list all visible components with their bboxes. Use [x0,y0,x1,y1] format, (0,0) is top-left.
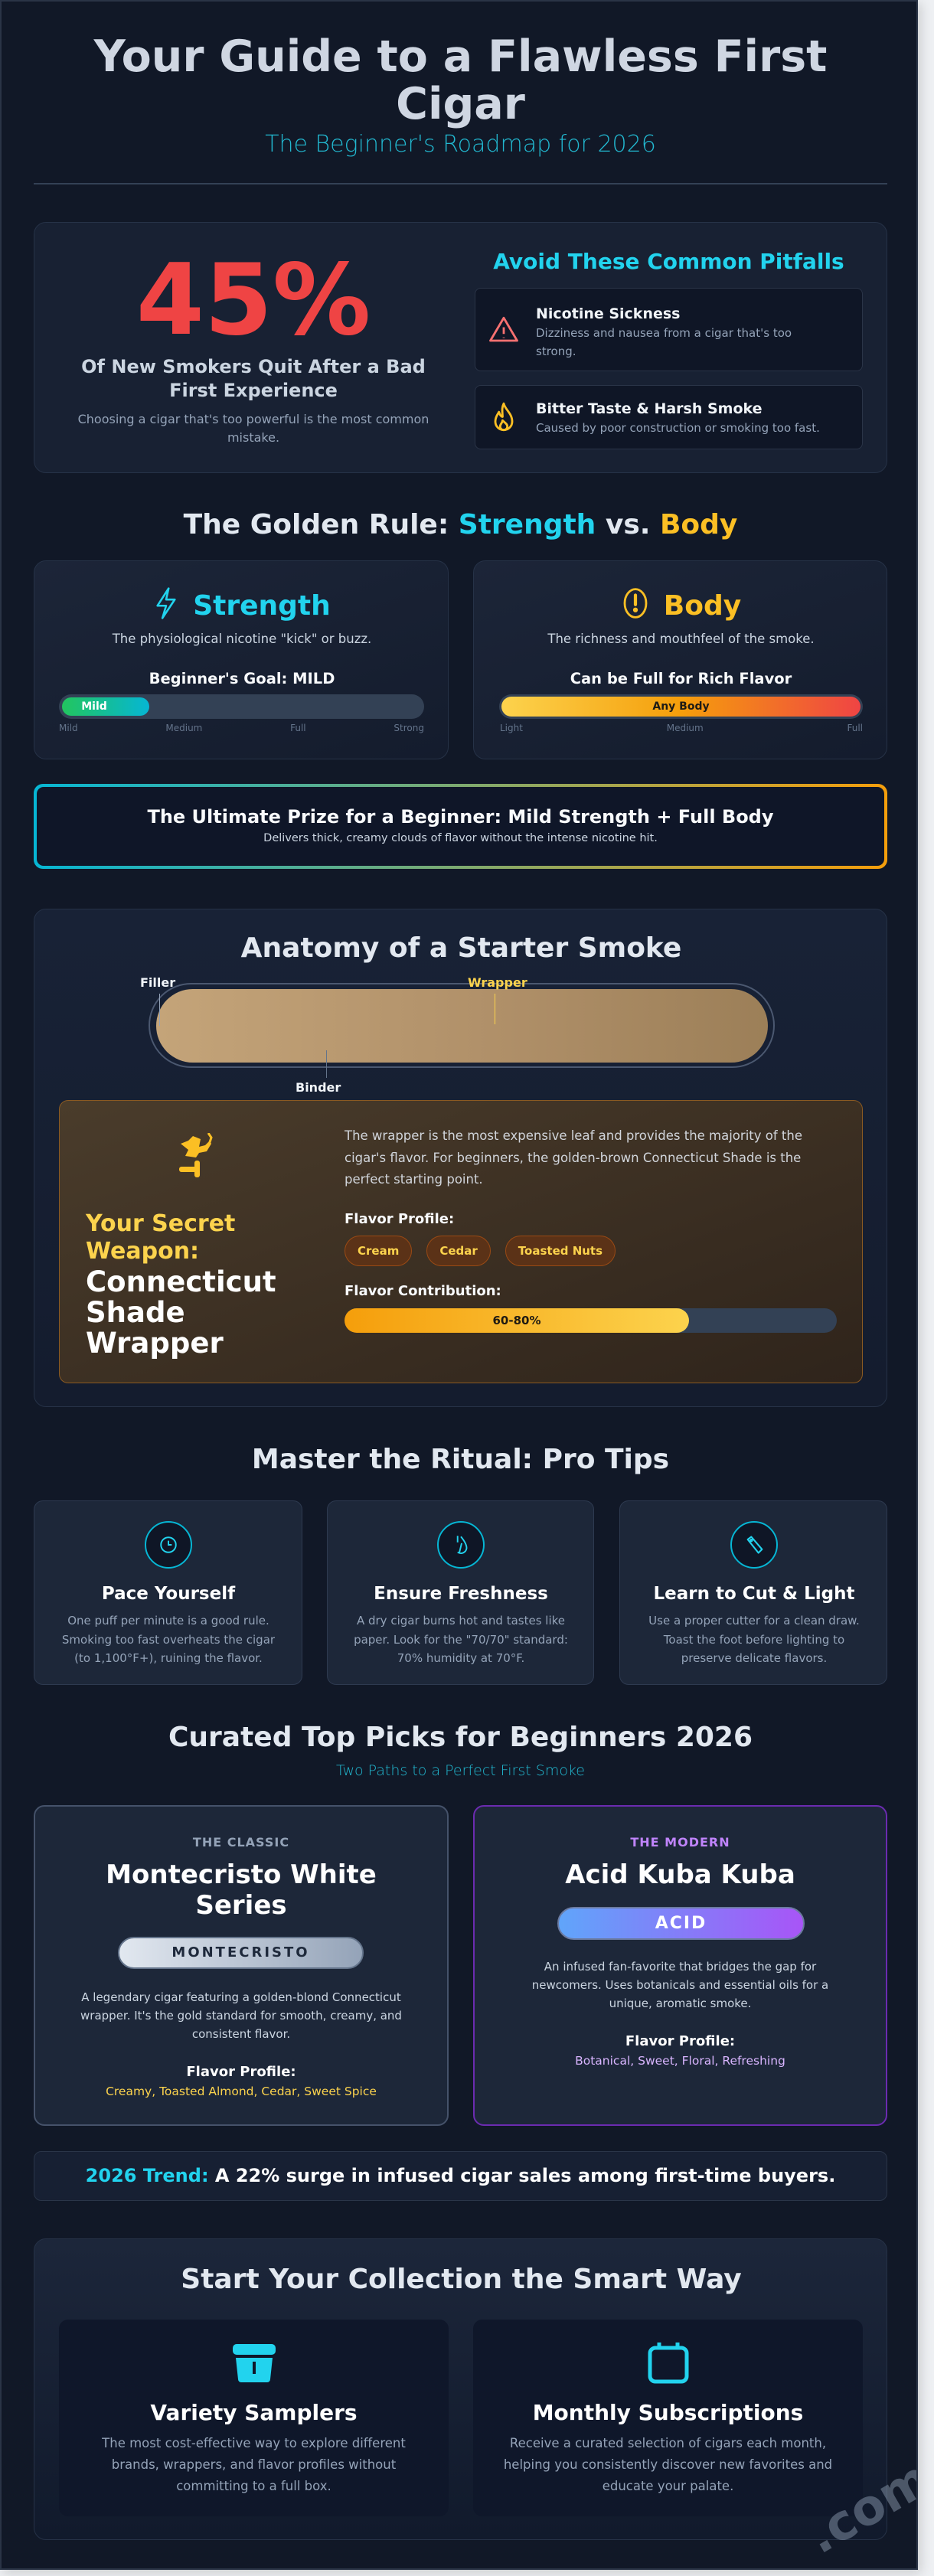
anatomy heading: Anatomy of a Starter Smoke [241,932,681,964]
flavor profile: Creamy, Toasted Almond, Cedar, Sweet Spice [106,2085,377,2098]
strength goal: Beginner's Goal: MILD [149,670,335,687]
strength scale labels: Full [290,723,306,733]
pitfall text: Dizziness and nausea from a cigar that's too strong. [536,326,792,358]
flavor profile: Botanical, Sweet, Floral, Refreshing [575,2054,785,2068]
body bar [499,694,863,719]
secret weapon title: Shade [86,1296,185,1329]
tip card: cut and light [619,1500,887,1685]
subscription text: Monthly Subscriptions [533,2400,803,2425]
heading: golden rule: The Golden Rule: Strength vs. Body [184,509,737,540]
description: A legendary cigar featuring a golden-blond Connecticut wrapper. It's the gold standard for smooth, creamy, and consistent flavor. [80,1990,402,2041]
cigar name: Series [195,1890,287,1921]
tip text [354,1584,568,1665]
body scale labels: Medium [667,723,704,733]
label: filler: Filler [140,975,175,990]
pitfall text: Caused by poor construction or smoking too fast. [536,421,820,435]
title [93,31,827,129]
card: secret weapon [59,1100,863,1383]
strength scale labels [59,723,424,733]
band: montecristo: MONTECRISTO [171,1944,310,1961]
big stat 45%: 45% [136,243,371,358]
strength title with bolt icon: Strength [193,590,331,622]
band: acid: ACID [655,1914,707,1933]
strength scale labels: Medium [165,723,202,733]
icon: droplet [437,1521,485,1569]
flavor profile pills: Flavor Profile: [345,1211,454,1227]
cigar diagram [140,975,775,1095]
cigar name: Acid Kuba Kuba [565,1859,795,1890]
flavor profile pills: Cream [358,1244,399,1258]
pitfall text [536,400,820,435]
strength description: The physiological nicotine "kick" or buzz. [113,632,371,646]
secret weapon title: Weapon: [86,1238,199,1265]
subheading: top picks: Two Paths to a Perfect First Smoke [336,1762,585,1779]
tip text: One puff per minute is a good rule. Smoking too fast overheats the cigar (to 1,100°F+), ruining the flavor. [62,1614,275,1665]
title: Your Guide to a Flawless First [94,31,827,82]
strength bar: Mild [81,700,107,713]
secret weapon title: Your Secret [86,1210,235,1237]
tip card: pace yourself [34,1500,302,1685]
tip card: freshness [327,1500,594,1685]
heading: pro tips: Master the Ritual: Pro Tips [252,1444,669,1475]
label: binder: Binder [296,1080,341,1095]
icon: warning triangle [489,317,518,341]
description: An infused fan-favorite that bridges the gap for newcomers. Uses botanicals and essential oils for a unique, aromatic smoke. [532,1960,828,2010]
subscription text [504,2400,832,2493]
label: the modern: THE MODERN [630,1835,730,1850]
body title with icon: Body [664,590,741,622]
body description: The richness and mouthfeel of the smoke. [547,632,815,646]
card: montecristo [34,1805,449,2126]
tip text [648,1584,860,1665]
icon: clock [145,1521,192,1569]
card: acid kuba kuba [473,1805,887,2126]
card: monthly subscriptions [473,2320,863,2516]
body title with icon [623,588,741,622]
icon: calendar [648,2343,689,2384]
secret weapon title: Connecticut [86,1265,276,1298]
icon: figure [179,1133,213,1177]
tip text: A dry cigar burns hot and tastes like paper. Look for the "70/70" standard: 70% humidity at 70°F. [354,1614,568,1665]
panel: stat and pitfalls [34,222,887,473]
flavor profile: Flavor Profile: [186,2064,296,2080]
body goal: Can be Full for Rich Flavor [570,670,792,687]
flavor profile [575,2033,785,2068]
pitfall text [536,305,792,358]
body bar: Any Body [652,700,710,713]
icon: sampler box [233,2344,276,2382]
callout: ultimate prize: The Ultimate Prize for a Beginner: Mild Strength + Full Body [147,806,774,828]
tip text: Use a proper cutter for a clean draw. Toast the foot before lighting to preserve delicate flavors. [648,1614,860,1665]
pitfall card: nicotine sickness [475,288,863,371]
tip text: Ensure Freshness [374,1584,548,1604]
panel: start your collection [34,2238,887,2540]
body scale labels [500,723,863,733]
wrapper description: The wrapper is the most expensive leaf and provides the majority of the cigar's flavor. For beginners, the golden-brown Connecticut Shade is the perfect starting point. [345,1128,802,1187]
collection heading: Start Your Collection the Smart Way [181,2264,742,2295]
pitfalls heading: Avoid These Common Pitfalls [493,249,844,274]
panel: body [473,560,887,759]
strength scale labels: Strong [394,723,424,733]
callout: ultimate prize: Delivers thick, creamy clouds of flavor without the intense nicotine hit. [263,832,658,844]
flavor contribution bar: Flavor Contribution: [345,1283,501,1299]
flavor profile pills [345,1211,616,1266]
subtitle: The Beginner's Roadmap for 2026 [265,131,656,158]
tip text: Learn to Cut & Light [654,1584,854,1604]
pitfall text: Nicotine Sickness [536,305,680,322]
subscription text: Receive a curated selection of cigars each month, helping you consistently discover new favorites and educate your palate. [504,2436,832,2493]
icon: tag [730,1521,778,1569]
tip text [62,1584,276,1665]
body scale labels: Light [500,723,523,733]
flavor profile: Flavor Profile: [625,2033,735,2049]
stat note: Choosing a cigar that's too powerful is the most common mistake. [78,412,429,445]
sampler text [102,2400,406,2493]
card: variety samplers [59,2320,449,2516]
flavor profile pills: Cedar [439,1244,478,1258]
callout: ultimate prize [34,784,887,869]
flavor contribution bar: 60-80% [492,1314,540,1327]
flavor contribution bar [345,1283,837,1333]
strength bar [59,694,424,719]
sampler text: Variety Samplers [150,2400,358,2425]
callout: 2026 trend: 2026 Trend: A 22% surge in infused cigar sales among first-time buyers. [86,2165,835,2186]
band: montecristo [118,1937,364,1969]
panel: anatomy [34,909,887,1407]
flavor profile pills: Toasted Nuts [518,1244,603,1258]
secret weapon title [86,1210,276,1360]
cigar name [106,1859,377,1921]
tip text: Pace Yourself [102,1584,235,1604]
sampler text: The most cost-effective way to explore different brands, wrappers, and flavor profiles without committing to a full box. [102,2436,406,2493]
pitfall card: bitter taste [475,385,863,449]
heading: top picks: Curated Top Picks for Beginners 2026 [168,1722,753,1753]
strength scale labels: Mild [59,723,78,733]
icon: flame [495,403,513,432]
label: wrapper: Wrapper [468,975,527,990]
label: the classic: THE CLASSIC [193,1835,289,1850]
callout: 2026 trend [34,2151,887,2201]
body scale labels: Full [847,723,863,733]
flavor profile [106,2064,377,2098]
cigar name: Montecristo White [106,1859,377,1890]
secret weapon title: Wrapper [86,1327,224,1360]
pitfall text: Bitter Taste & Harsh Smoke [536,400,763,417]
panel: strength [34,560,449,759]
band: acid [557,1907,805,1940]
title: Cigar [396,79,525,129]
stat caption: Of New Smokers Quit After a Bad First Experience [81,356,426,401]
